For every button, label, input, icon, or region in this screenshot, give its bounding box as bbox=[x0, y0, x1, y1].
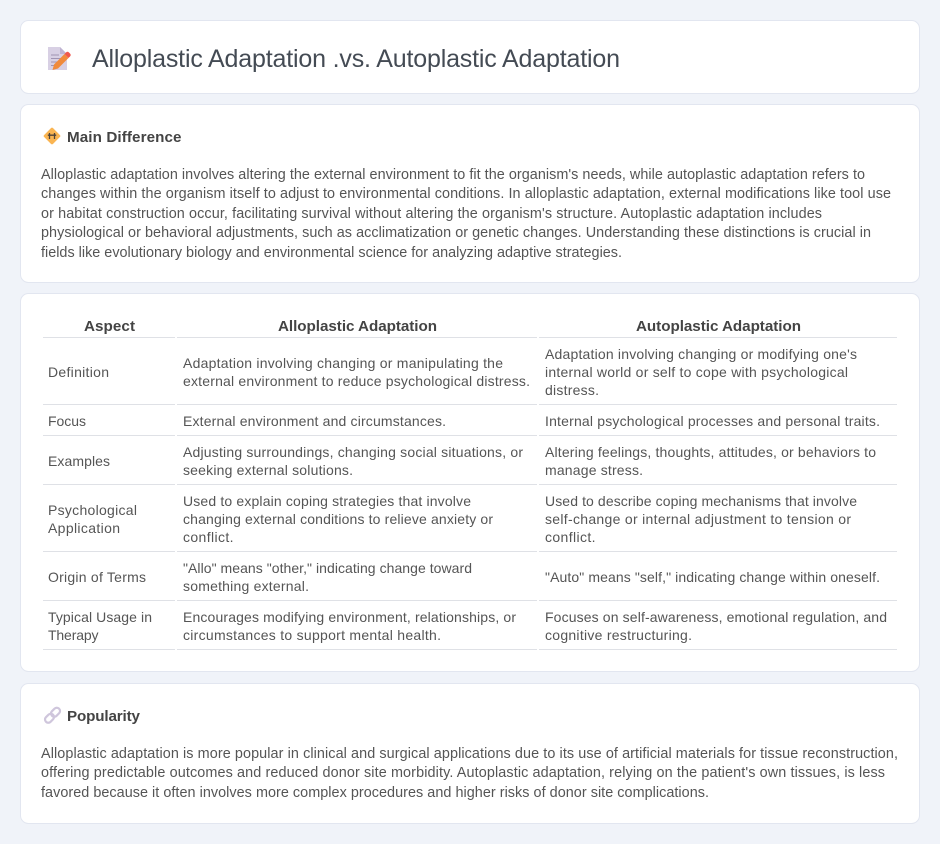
table header row bbox=[84, 318, 801, 335]
row: typical usage in therapy: Typical Usage in bbox=[48, 609, 152, 625]
row: examples: Adjusting surroundings, changing social situations, or bbox=[183, 444, 523, 460]
text block: main difference paragraph: fields like evolutionary biology and environmental science for analyzing adaptive strategies. bbox=[41, 245, 622, 261]
row: typical usage in therapy: Encourages modifying environment, relationships, or bbox=[183, 609, 516, 625]
row: typical usage in therapy: cognitive restructuring. bbox=[545, 627, 692, 643]
row: focus: External environment and circumstances. bbox=[183, 413, 446, 429]
text block: main difference paragraph: physiological or behavioral adjustments, such as acclimatization or genetic changes. Understanding these distinctions is crucial in bbox=[41, 225, 871, 241]
text block: popularity paragraph: favored because it often involves more complex procedures and higher risks of donor site complications. bbox=[41, 785, 709, 801]
row: psychological application bbox=[48, 493, 857, 545]
row: examples: Altering feelings, thoughts, attitudes, or behaviors to bbox=[545, 444, 876, 460]
row: definition: Definition bbox=[48, 364, 109, 380]
text block: main difference paragraph bbox=[41, 167, 891, 261]
row: origin of terms: "Allo" means "other," indicating change toward bbox=[183, 560, 472, 576]
row: definition: Adaptation involving changing or manipulating the bbox=[183, 355, 503, 371]
row: typical usage in therapy: circumstances to support mental health. bbox=[183, 627, 441, 643]
row: definition: Adaptation involving changing or modifying one's bbox=[545, 346, 857, 362]
row: typical usage in therapy: Therapy bbox=[48, 627, 98, 643]
panel: main difference bbox=[20, 104, 920, 282]
panel: comparison table bbox=[20, 294, 920, 672]
row: focus bbox=[48, 413, 880, 429]
row: examples bbox=[48, 444, 876, 478]
text block: popularity paragraph: Alloplastic adaptation is more popular in clinical and surgical applications due to its use of artificial materials for tissue reconstruction, bbox=[41, 746, 898, 762]
title: Alloplastic Adaptation .vs. Autoplastic Adaptation bbox=[92, 45, 620, 73]
row: psychological application: Application bbox=[48, 520, 120, 536]
row: examples: Examples bbox=[48, 453, 110, 469]
row: origin of terms: Origin of Terms bbox=[48, 569, 146, 585]
row: psychological application: changing external conditions to relieve anxiety or bbox=[183, 511, 493, 527]
row: origin of terms: something external. bbox=[183, 578, 309, 594]
row: definition: external environment to reduce psychological distress. bbox=[183, 373, 530, 389]
row: focus: Internal psychological processes and personal traits. bbox=[545, 413, 880, 429]
text block: popularity paragraph: offering predictable outcomes and reduced donor site morbidity. Autoplastic adaptation, relying on the patient's own tissues, is less bbox=[41, 765, 885, 781]
row: psychological application: conflict. bbox=[183, 529, 234, 545]
panel: popularity bbox=[20, 684, 920, 824]
row: typical usage in therapy: Focuses on self-awareness, emotional regulation, and bbox=[545, 609, 887, 625]
row: origin of terms: "Auto" means "self," indicating change within oneself. bbox=[545, 569, 880, 585]
icon: document with pencil bbox=[48, 47, 71, 70]
heading: main difference: Main Difference bbox=[67, 129, 182, 146]
text block: popularity paragraph bbox=[41, 746, 898, 801]
text block: main difference paragraph: Alloplastic adaptation involves altering the external environment to fit the organism's needs, while autoplastic adaptation refers to bbox=[41, 167, 865, 183]
row: psychological application: Psychological bbox=[48, 502, 137, 518]
row: origin of terms bbox=[48, 560, 880, 594]
heading: popularity: Popularity bbox=[67, 708, 141, 725]
row: typical usage in therapy bbox=[48, 609, 887, 643]
row: focus: Focus bbox=[48, 413, 86, 429]
text block: main difference paragraph: or habitat construction occur, facilitating survival without altering the organism's structure. Autoplastic adaptation includes bbox=[41, 206, 822, 222]
table header row: Autoplastic Adaptation bbox=[636, 318, 801, 335]
row: psychological application: self-change or internal adjustment to tension or bbox=[545, 511, 851, 527]
row: psychological application: conflict. bbox=[545, 529, 596, 545]
row: definition bbox=[48, 346, 857, 398]
row: definition: distress. bbox=[545, 382, 599, 398]
table header row: Aspect bbox=[84, 318, 135, 335]
icon: chain link bbox=[44, 706, 61, 724]
text block: main difference paragraph: changes within the organism itself to adjust to environmental conditions. In alloplastic adaptation, external modifications like tool use bbox=[41, 186, 891, 202]
table header row: Alloplastic Adaptation bbox=[278, 318, 437, 335]
row: psychological application: Used to explain coping strategies that involve bbox=[183, 493, 471, 509]
row: psychological application: Used to describe coping mechanisms that involve bbox=[545, 493, 857, 509]
row: examples: manage stress. bbox=[545, 462, 643, 478]
panel: header bbox=[20, 20, 920, 94]
row: examples: seeking external solutions. bbox=[183, 462, 353, 478]
row: definition: internal world or self to cope with psychological bbox=[545, 364, 848, 380]
icon: orange diamond sign bbox=[43, 127, 61, 145]
